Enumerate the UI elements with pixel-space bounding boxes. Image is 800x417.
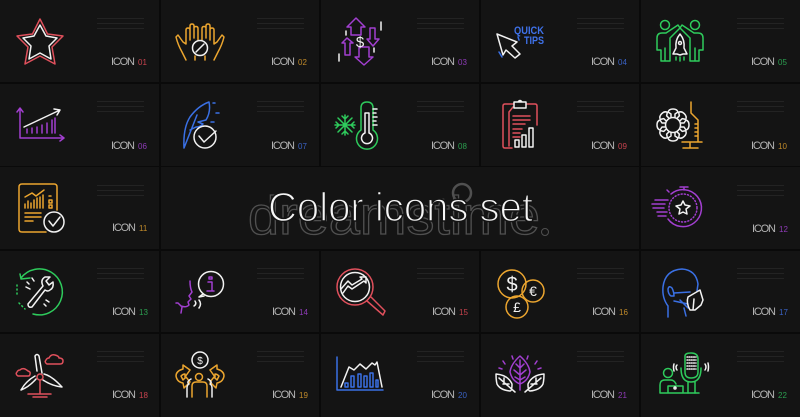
label: icon 06: 06 (138, 142, 147, 151)
label: icon 21 (591, 389, 627, 401)
label: icon 03 (431, 56, 467, 68)
icon: podcast microphone (660, 353, 708, 393)
label: icon 15: ICON (432, 306, 456, 318)
label: icon 17 (752, 306, 788, 318)
label: icon 08: 08 (458, 142, 467, 151)
label: icon 12 (752, 223, 788, 235)
label: icon 10 (751, 140, 787, 152)
icon: currency coins: € (529, 283, 537, 299)
label: icon 12: 12 (779, 225, 788, 234)
label: icon 10: 10 (778, 142, 787, 151)
label: icon 02: ICON (271, 56, 295, 68)
icon: speaking face with info (176, 272, 224, 313)
icon: feather with check (184, 102, 219, 148)
label: icon 14: ICON (272, 306, 296, 318)
label: icon 22 (751, 389, 787, 401)
icon: star (17, 19, 63, 64)
icon: market chart (337, 357, 383, 390)
icon: growth chart (17, 108, 64, 141)
label: icon 19: ICON (272, 389, 296, 401)
label: icon 07: 07 (298, 142, 307, 151)
icon: currency coins (498, 270, 544, 318)
icon: wrench refresh (17, 269, 62, 315)
label: icon 16: 16 (619, 308, 628, 317)
icon: currency coins: $ (506, 274, 518, 296)
icon: quick tips cursor: QUICK (514, 25, 544, 37)
label: icon 20: 20 (458, 391, 467, 400)
icon: team and money flow (176, 352, 224, 397)
label: icon 19 (272, 389, 308, 401)
icon: stopwatch star (652, 187, 701, 227)
label: icon 09: 09 (618, 142, 627, 151)
icon: magnifier chart (337, 269, 385, 315)
label: icon 21: ICON (591, 389, 615, 401)
icon: head with mask (663, 269, 703, 317)
label: icon 18 (112, 389, 148, 401)
label: icon 13: 13 (139, 308, 148, 317)
icon: dollar arrows (339, 18, 381, 65)
label: icon 03: 03 (458, 58, 467, 67)
label: icon 05 (751, 56, 787, 68)
icon: hands with forbidden sign (176, 24, 224, 60)
label: icon 04 (591, 56, 627, 68)
label: icon 04: 04 (618, 58, 627, 67)
label: icon 18: ICON (112, 389, 136, 401)
icon: currency coins: £ (513, 299, 521, 315)
icon: report checklist (19, 184, 64, 232)
label: icon 01 (111, 56, 147, 68)
label: icon 05: ICON (751, 56, 775, 68)
icon: virus and syringe (657, 102, 702, 148)
icon: team and money flow: $ (197, 356, 203, 367)
label: icon 01: 01 (138, 58, 147, 67)
label: icon 13 (112, 306, 148, 318)
label: icon 14: 14 (299, 308, 308, 317)
label: icon 02: 02 (298, 58, 307, 67)
label: icon 06 (111, 140, 147, 152)
label: icon 15: 15 (459, 308, 468, 317)
label: icon 17: ICON (752, 306, 776, 318)
label: icon 05: 05 (778, 58, 787, 67)
label: icon 15 (432, 306, 468, 318)
label: icon 11: 11 (139, 224, 148, 233)
label: icon 09: ICON (591, 140, 615, 152)
label: icon 11 (112, 222, 148, 234)
icon: wind turbine and clouds (16, 354, 63, 397)
label: icon 16: ICON (592, 306, 616, 318)
label: icon 04: ICON (591, 56, 615, 68)
icon: quick tips cursor: TIPS (524, 35, 544, 47)
label: icon 10: ICON (751, 140, 775, 152)
label: icon 01: ICON (111, 56, 135, 68)
label: icon 07 (271, 140, 307, 152)
icon: leaves (496, 356, 544, 392)
label: icon 18: 18 (139, 391, 148, 400)
label: icon 08: ICON (431, 140, 455, 152)
label: icon 22: ICON (751, 389, 775, 401)
label: icon 20 (431, 389, 467, 401)
label: icon 12: ICON (752, 223, 776, 235)
icon: clipboard report (503, 100, 537, 148)
label: icon 19: 19 (299, 391, 308, 400)
icon: team with rocket (657, 20, 703, 61)
label: icon 21: 21 (618, 391, 627, 400)
label: icon 09 (591, 140, 627, 152)
label: icon 14 (272, 306, 308, 318)
label: icon 08 (431, 140, 467, 152)
label: icon 02 (271, 56, 307, 68)
icon: quick tips cursor (497, 25, 544, 58)
label: icon 16 (592, 306, 628, 318)
watermark: dreamstime (248, 186, 540, 246)
icon: snowflake thermometer (335, 102, 378, 149)
label: icon 11: ICON (112, 222, 136, 234)
label: icon 17: 17 (779, 308, 788, 317)
label: icon 07: ICON (271, 140, 295, 152)
label: icon 03: ICON (431, 56, 455, 68)
title: Color icons set (268, 184, 534, 230)
icon: dollar arrows: $ (356, 34, 365, 51)
label: icon 22: 22 (778, 391, 787, 400)
label: icon 06: ICON (111, 140, 135, 152)
label: icon 13: ICON (112, 306, 136, 318)
label: icon 20: ICON (431, 389, 455, 401)
